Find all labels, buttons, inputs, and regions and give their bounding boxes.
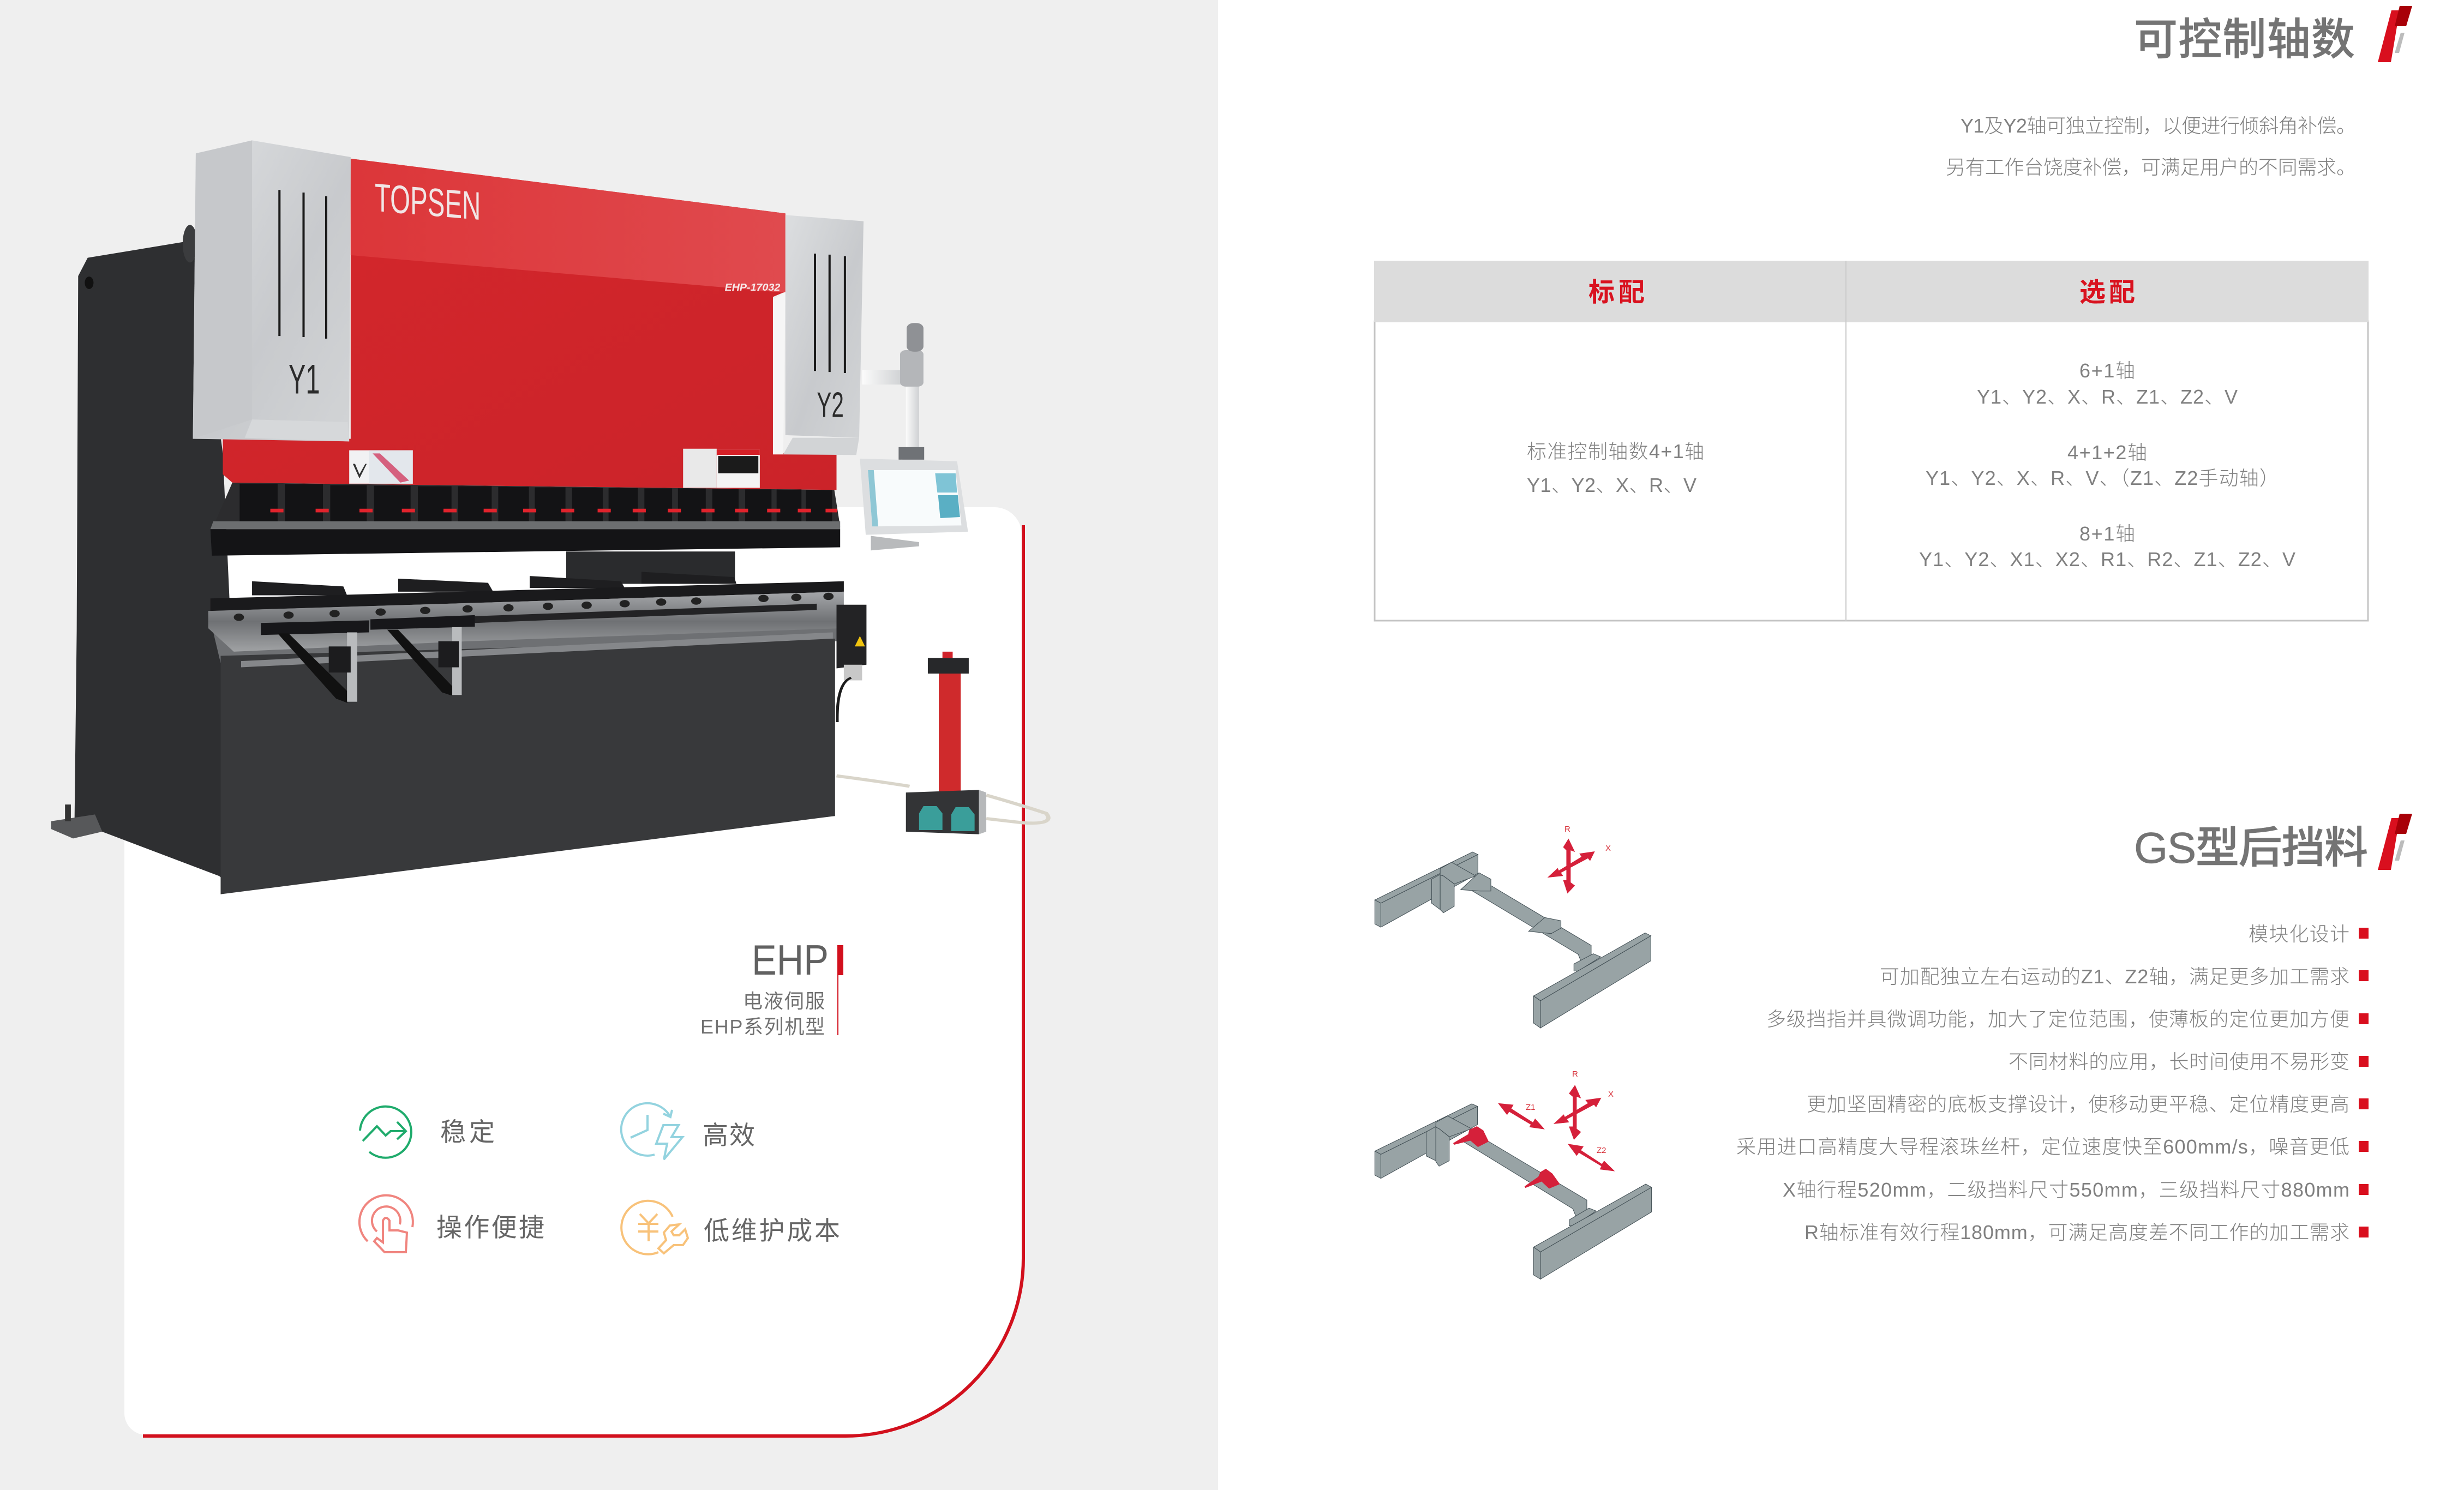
red carriers [1453,1126,1560,1188]
diagram: backgauge with Z axes [1375,1070,1652,1279]
heading: axes: 可控制轴数 [2134,15,2355,64]
icon: heading mark 1 [2378,6,2412,62]
punch backing [213,483,840,526]
label R: R [1564,825,1570,834]
icon: low maintenance cost [621,1201,688,1254]
text: axes description: Y1及Y2轴可独立控制，以便进行倾斜角补偿。 [1961,115,2356,137]
feature lines: 可加配独立左右运动的Z1、Z2轴，满足更多加工需求 [1880,965,2349,988]
punch beam [211,529,840,556]
feature lines: 更加坚固精密的底板支撑设计，使移动更平稳、定位精度更高 [1807,1093,2349,1115]
machine: press brake: TOPSEN [375,175,481,229]
foot bolt [65,804,71,821]
optional cell: 6+1轴 [2079,359,2135,382]
feature lines: 模块化设计 [2249,923,2349,945]
control screen [860,459,968,550]
frame hub [183,225,197,262]
bullets [2359,928,2369,1237]
apron backing [208,592,844,663]
table: axes configuration [1374,261,2369,621]
label X: X [1605,844,1611,853]
icon: stable [360,1107,411,1158]
optional cell: 8+1轴 [2079,522,2135,545]
punch clamp pegs [271,509,837,512]
right silver cover: Y2 [817,384,844,424]
feature lines: 不同材料的应用，长时间使用不易形变 [2009,1050,2349,1073]
feature lines: 多级挡指并具微调功能，加大了定位范围，使薄板的定位更加方便 [1766,1008,2349,1030]
optional cell [1919,359,2295,570]
foot pedal stand [906,652,986,834]
optional cell: 4+1+2轴 [2067,441,2147,464]
red outline of card [143,525,1023,1436]
heading: EHP [752,936,843,1035]
axis arrows R X Z1 Z2 [1498,1085,1615,1171]
feature list [1736,923,2369,1243]
panel: left grey background [0,0,1218,1490]
carriers [1461,873,1491,891]
label Z2: Z2 [1597,1146,1606,1155]
front support arm right [370,615,475,695]
foot cable [836,776,1048,823]
feature lines [1736,923,2349,1243]
heading: GS backgauge: GS型后挡料 [2134,824,2368,872]
label X: X [1608,1090,1614,1099]
text: easy operation: 操作便捷 [436,1213,544,1242]
rear bar right [1574,954,1601,971]
cross beam [1461,1140,1587,1217]
lower apron [220,639,835,894]
text: axes description [1946,115,2356,178]
column divider [1845,261,1846,621]
icon: efficient [621,1103,682,1159]
red upper cover [351,159,786,293]
icon: easy operation [359,1195,413,1252]
header: standard: 标配 [1588,278,1645,307]
guide rail [241,632,833,668]
optional cell: Y1、Y2、X、R、V、（Z1、Z2手动轴） [1926,467,2279,489]
rear bar left [1375,1104,1478,1155]
control arm [862,323,924,460]
text: efficient: 高效 [703,1121,755,1150]
subheading: series: EHP系列机型 [700,1016,825,1038]
foot bracket [51,814,103,838]
label R: R [1572,1070,1578,1079]
steel clamp rail [208,592,844,652]
rear bar right [1569,1208,1596,1225]
clamp dark slot [475,604,817,623]
table body [1375,321,2368,621]
diagram: backgauge standard [1375,825,1651,1028]
warning labels [349,449,760,488]
feature lines: 采用进口高精度大导程滚珠丝杆，定位速度快至600mm/s，噪音更低 [1736,1135,2349,1158]
bolts [234,593,834,621]
text: axes description: 另有工作台饶度补偿，可满足用户的不同需求。 [1946,156,2356,178]
panel: white rounded card [124,507,1022,1435]
header: optional: 选配 [2079,278,2135,307]
optional cell: Y1、Y2、X1、X2、R1、R2、Z1、Z2、V [1919,548,2295,570]
axis arrows R X [1548,838,1595,893]
feature lines: R轴标准有效行程180mm，可满足高度差不同工作的加工需求 [1804,1221,2349,1243]
front support arm left [261,620,369,703]
text: stable: 稳定 [440,1118,495,1146]
rear gauge fingers [252,572,736,596]
label Z1: Z1 [1526,1103,1536,1112]
red ram body [223,159,836,490]
left silver cover [193,140,351,441]
central cylinder [566,551,735,584]
standard cell: 标准控制轴数4+1轴 [1527,440,1704,462]
subheading: series: 电液伺服 [743,990,825,1012]
punch beam top strip [211,521,840,529]
model text: EHP-17032 [725,281,781,293]
machine: press brake [51,140,1048,894]
optional cell: Y1、Y2、X、R、Z1、Z2、V [1977,386,2238,408]
red bar [837,945,843,975]
table header [1374,261,2369,322]
frame hole [85,277,93,289]
subheading: series [700,990,825,1038]
rear bar left [1375,852,1478,903]
feature lines: X轴行程520mm，二级挡料尺寸550mm，三级挡料尺寸880mm [1783,1179,2349,1201]
standard cell: Y1、Y2、X、R、V [1527,474,1696,496]
lower beam top [211,581,844,611]
icon: heading mark 2 [2378,814,2412,870]
upper punches [239,484,832,527]
side sensor box [836,605,866,722]
text: low maintenance cost: 低维护成本 [704,1216,840,1245]
machine frame [75,242,232,886]
red thin line [837,975,838,1035]
heading: EHP: EHP [752,936,829,984]
standard cell [1527,440,1704,496]
upright block [1431,874,1440,910]
upright block [1426,1127,1436,1161]
left silver cover: Y1 [289,356,320,402]
cross beam [1467,886,1591,963]
right silver cover [773,215,864,455]
